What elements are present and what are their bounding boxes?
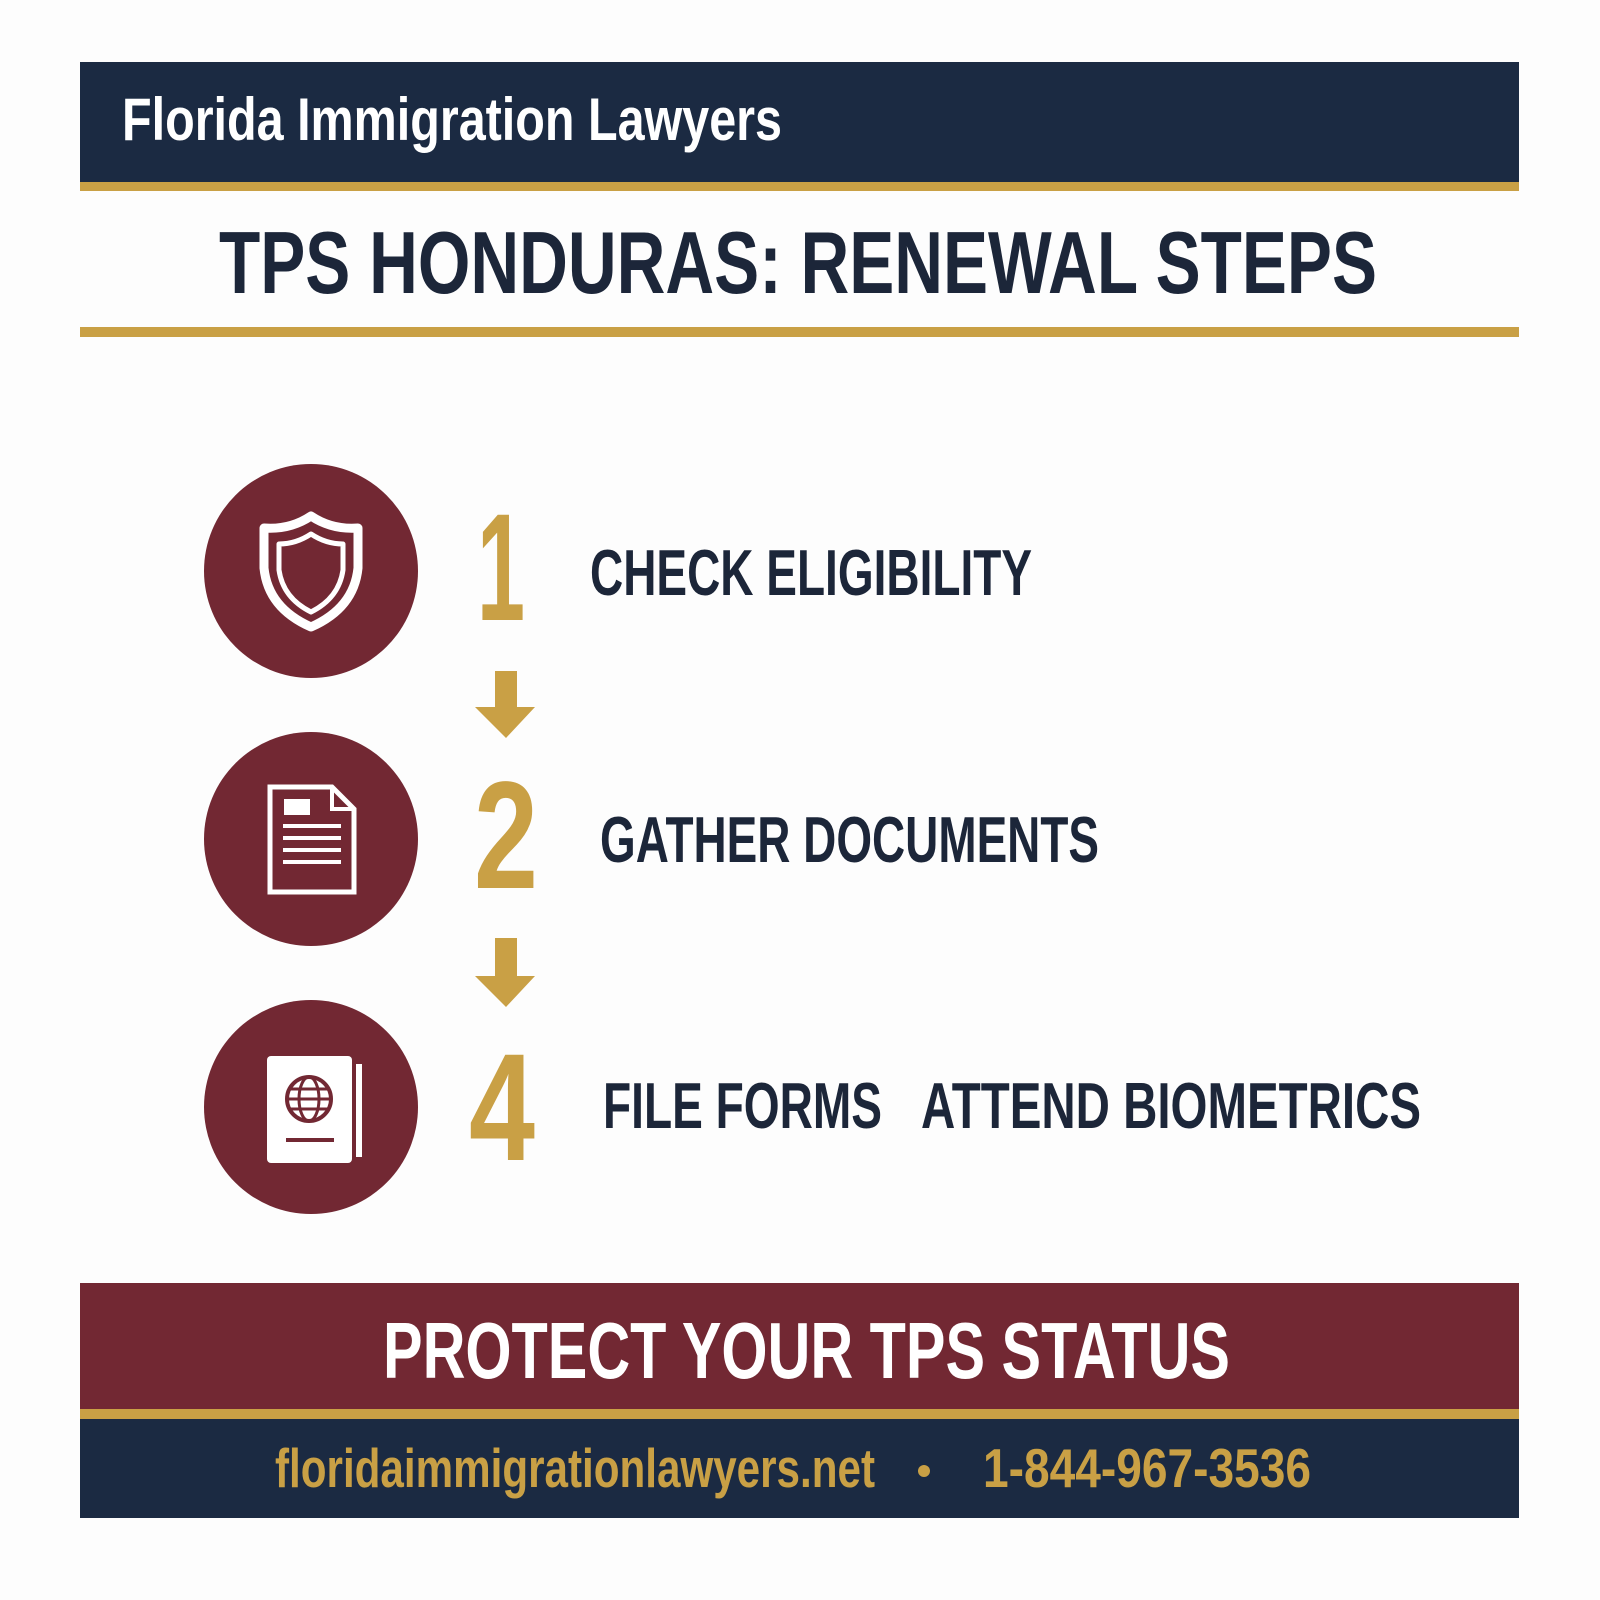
icon: document — [204, 732, 418, 946]
label: file forms attend biometrics: ATTEND BIOMETRICS — [921, 1069, 1421, 1142]
step 1 — [204, 464, 1032, 678]
label: file forms attend biometrics: FILE FORMS — [603, 1069, 882, 1142]
step 3 — [204, 1000, 1421, 1214]
call to action: PROTECT YOUR TPS STATUS — [383, 1306, 1230, 1395]
header bar — [80, 62, 1519, 191]
icon: shield — [204, 464, 418, 678]
contact line: floridaimmigrationlawyers.net — [275, 1437, 875, 1499]
label: check eligibility: CHECK ELIGIBILITY — [590, 536, 1032, 609]
label: gather documents: GATHER DOCUMENTS — [600, 803, 1099, 876]
footer banner — [80, 1283, 1519, 1518]
step 2 — [204, 732, 1099, 946]
footer banner: 1-844-967-3536 — [983, 1437, 1311, 1499]
number 2: 2 — [474, 750, 538, 921]
header text: Florida Immigration Lawyers — [122, 86, 782, 153]
arrow 2 — [475, 938, 535, 1007]
number 1: 1 — [477, 482, 525, 653]
icon: passport — [204, 1000, 418, 1214]
number 4: 4 — [469, 1022, 535, 1193]
label: file forms attend biometrics — [603, 1069, 1421, 1142]
arrow 1 — [475, 671, 535, 738]
